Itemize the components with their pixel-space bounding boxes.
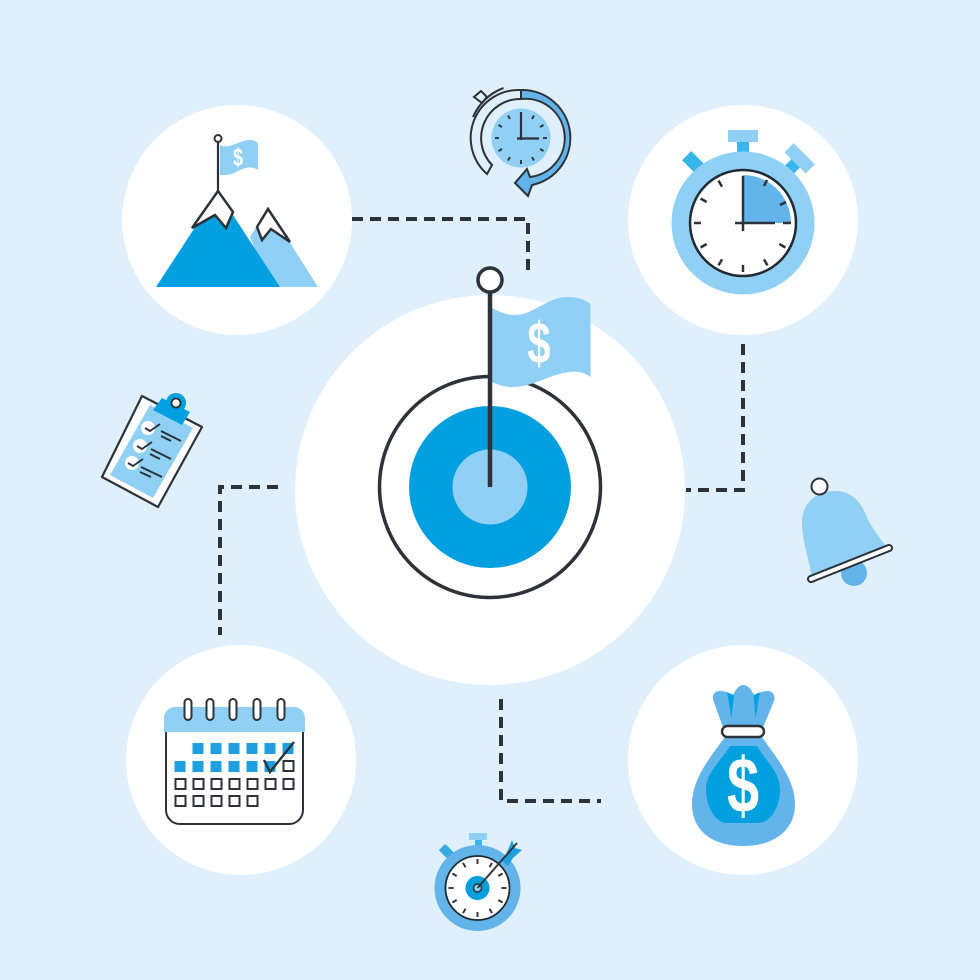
icon: clipboard checklist [102,393,202,507]
calendar empty days [176,761,294,806]
panel: money bag [628,645,858,875]
bag tie [722,726,764,737]
central flag pole [478,268,502,487]
clock crown [473,88,504,117]
large mountain [156,192,280,287]
small stopwatch buttons [439,833,487,861]
clock face [492,108,550,168]
dart [478,840,522,888]
open arrow tail [471,90,521,174]
panel: stopwatch [628,105,858,335]
bag top [713,685,774,730]
mountain flag: $ [233,143,243,171]
panel: mountains with flag [122,105,352,335]
panel: central target with flag [295,268,685,685]
stopwatch face [690,170,796,276]
checklist items [125,421,181,477]
icon: stopwatch with dart [434,833,522,931]
bell clapper [841,560,867,586]
small target [466,876,490,900]
clipboard board [102,396,202,507]
bag dollar sign: $ [727,742,759,829]
bell rim [811,548,889,579]
bell knob [812,478,828,494]
small stopwatch face [446,856,510,920]
calendar page [166,732,303,824]
blue arrow band [515,90,570,196]
icon: clock with circular arrow [471,88,570,196]
calendar header [164,707,305,732]
bell body [802,491,887,578]
icon: bell [802,478,889,586]
mountain flag [214,135,258,191]
bag neck accents [727,692,760,718]
clipboard paper [110,405,193,498]
small mountain [250,208,318,287]
stopwatch body [672,152,814,294]
calendar filled days [174,743,294,772]
small stopwatch body [434,845,520,931]
dashed connectors [220,219,743,801]
calendar rings [184,699,284,720]
central flag [492,297,590,387]
snow caps [192,191,290,242]
bag panel [706,746,780,823]
central flag: $ [527,310,551,376]
stopwatch buttons [682,130,815,176]
bag body [692,737,795,846]
clipboard clip [153,393,190,425]
calendar check mark [264,742,294,772]
panel: calendar [126,645,356,875]
